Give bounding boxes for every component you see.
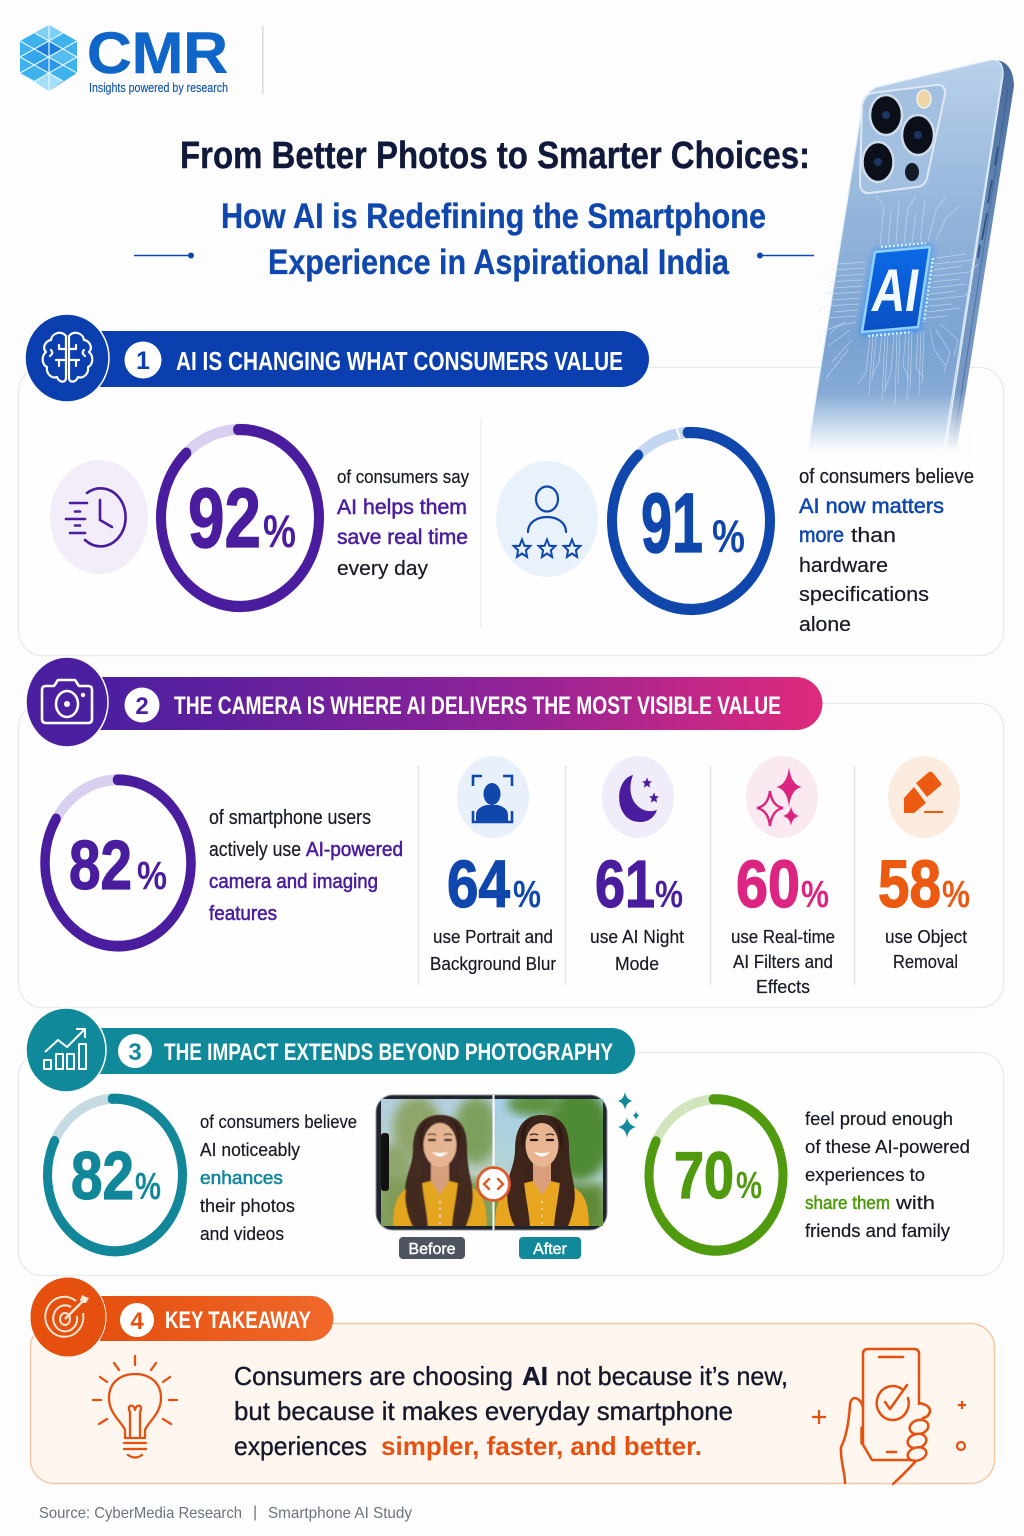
- stat: object removal: [878, 756, 970, 972]
- gauge: 70%: [647, 1097, 785, 1253]
- text: 92% description: AI helps them: [337, 496, 467, 519]
- takeaway text: AI: [522, 1361, 548, 1391]
- number badge: 1: [136, 347, 150, 375]
- text: 92% description: save real time: [337, 526, 468, 549]
- gauge: 82% camera: 82: [69, 826, 132, 904]
- takeaway text: Consumers are choosing: [234, 1361, 513, 1391]
- text: 82% enhancement description: AI noticeably: [200, 1139, 301, 1160]
- gauge: 82% enhancement: %: [135, 1166, 161, 1208]
- phone back: [806, 60, 1003, 460]
- camera bump: [860, 85, 945, 193]
- wordmark: CMR: [87, 21, 228, 86]
- stat: object removal: %: [942, 874, 970, 916]
- gauge: 82% enhancement: [45, 1096, 185, 1254]
- icon: hand holding phone: [841, 1349, 930, 1484]
- number badge: 2: [135, 693, 149, 720]
- bottom fade: [800, 392, 972, 462]
- icon: portrait: [457, 756, 529, 838]
- icon: sparkles: [746, 756, 818, 838]
- gauge: 82% enhancement: 82: [71, 1138, 134, 1214]
- gauge: 91%: %: [712, 510, 745, 562]
- header band: [100, 677, 822, 730]
- text: 82% camera description: AI-powered: [306, 839, 403, 861]
- stat: portrait blur: [430, 756, 556, 974]
- CMR logo: [20, 21, 228, 95]
- number badge: [124, 342, 162, 378]
- stat: object removal: use Object: [885, 926, 967, 947]
- title: From Better Photos to Smarter Choices:: [180, 135, 810, 177]
- section 2 header: [26, 657, 822, 747]
- number badge: 3: [128, 1039, 142, 1066]
- takeaway text: [234, 1361, 788, 1461]
- stat: portrait blur: 64: [447, 847, 510, 922]
- AI chip: [860, 243, 933, 336]
- takeaway text: but because it makes everyday smartphone: [234, 1396, 733, 1426]
- chip label: AI: [870, 257, 919, 324]
- gauge: 91%: [609, 427, 773, 613]
- icon: moon and stars: [602, 756, 674, 838]
- icon: person with three stars: [496, 461, 598, 577]
- text: 82% camera description: camera and imaging: [209, 871, 378, 893]
- text: 82% enhancement description: [200, 1111, 357, 1244]
- text: 91% description: alone: [799, 614, 851, 636]
- icon: target with arrow: [30, 1277, 106, 1357]
- source line: |: [253, 1504, 257, 1521]
- icon: brain: [25, 314, 109, 402]
- number badge: [124, 688, 160, 722]
- text: 92% description: of consumers say: [337, 466, 470, 487]
- stat: night mode: Mode: [615, 953, 659, 974]
- text: 70% description: friends and family: [805, 1220, 951, 1241]
- text: 82% enhancement description: enhances: [200, 1167, 283, 1188]
- stat: filters: AI Filters and: [733, 951, 833, 972]
- header band: [100, 1028, 635, 1074]
- text: 82% camera description: features: [209, 903, 277, 925]
- stat: filters: 60: [736, 847, 800, 922]
- icon: growth chart: [26, 1008, 106, 1092]
- label: before: Before: [408, 1241, 456, 1258]
- text: 92% description: every day: [337, 558, 428, 580]
- text: 91% description: than: [851, 525, 896, 547]
- stat: filters: %: [801, 874, 829, 916]
- text: 91% description: more: [799, 524, 844, 547]
- text: 70% description: experiences to: [805, 1164, 925, 1185]
- card 1 outline: [18, 368, 1004, 656]
- stat: filters: [731, 756, 835, 997]
- text: 92% description: [337, 466, 470, 580]
- source line: Source: CyberMedia Research: [39, 1505, 242, 1522]
- gauge: 91%: 91: [641, 476, 703, 570]
- label: after: After: [533, 1241, 568, 1258]
- phone illustration: [800, 60, 1014, 462]
- takeaway text: not because it’s new,: [556, 1361, 788, 1391]
- subtitle: Experience in Aspirational India: [268, 243, 729, 282]
- section 3 header: [26, 1008, 635, 1092]
- icon: eraser: [888, 756, 960, 838]
- takeaway text: experiences: [234, 1431, 367, 1461]
- text: 82% enhancement description: their photos: [200, 1195, 295, 1216]
- gauge: 92%: %: [263, 505, 296, 557]
- text: 70% description: feel proud enough: [805, 1108, 953, 1129]
- source line: Smartphone AI Study: [268, 1505, 412, 1522]
- text: 70% description: share them: [805, 1192, 890, 1213]
- text: 82% camera description: [209, 807, 403, 925]
- section 4 header: [30, 1277, 334, 1357]
- header band: [100, 1296, 334, 1341]
- text: 91% description: AI now matters: [799, 495, 944, 518]
- number badge: [118, 1034, 152, 1068]
- stat: portrait blur: Background Blur: [430, 953, 556, 974]
- text: 91% description: specifications: [799, 584, 929, 606]
- gauge: 82% camera: %: [137, 854, 167, 898]
- section 1 header: [25, 314, 649, 402]
- label: before: [399, 1237, 465, 1259]
- stat: filters: Effects: [756, 976, 810, 997]
- lenses: [862, 90, 934, 182]
- text: 82% camera description: actively use: [209, 839, 301, 861]
- number badge: 4: [130, 1308, 144, 1335]
- after image: [494, 1099, 603, 1226]
- before and after phone: [376, 1089, 612, 1230]
- stat: object removal: 58: [878, 847, 941, 922]
- number badge: [120, 1303, 154, 1337]
- card 3 outline: [18, 1052, 1004, 1276]
- icon: slider handle: [478, 1168, 510, 1200]
- label: after: [519, 1237, 581, 1259]
- gauge: 70%: %: [736, 1165, 762, 1207]
- header label: THE CAMERA IS WHERE AI DELIVERS THE MOST VISIBLE VALUE: [174, 692, 781, 720]
- source line: [39, 1504, 412, 1522]
- text: 91% description: hardware: [799, 555, 888, 577]
- gauge: 70%: 70: [674, 1138, 734, 1212]
- phone side band: [930, 60, 1014, 460]
- stat: portrait blur: use Portrait and: [433, 926, 553, 947]
- circuit traces: [818, 196, 978, 405]
- takeaway text: simpler, faster, and better.: [381, 1431, 702, 1461]
- text: 82% camera description: of smartphone users: [209, 807, 371, 829]
- stat: filters: use Real-time: [731, 926, 835, 947]
- text: 82% enhancement description: and videos: [200, 1223, 284, 1244]
- icon: hexagon cube mark: [20, 25, 77, 91]
- icon: teal sparkles: [618, 1092, 639, 1138]
- icon: light bulb: [93, 1356, 177, 1458]
- text: 82% enhancement description: of consumers believe: [200, 1111, 357, 1132]
- icon: clock with speed lines: [50, 460, 148, 574]
- stat: night mode: 61: [595, 847, 655, 922]
- header label: THE IMPACT EXTENDS BEYOND PHOTOGRAPHY: [164, 1039, 613, 1066]
- text: 91% description: [799, 466, 974, 636]
- stat: object removal: Removal: [893, 951, 958, 972]
- subtitle: [221, 197, 766, 282]
- header band: [100, 331, 649, 387]
- text: 91% description: of consumers believe: [799, 466, 974, 488]
- stat: night mode: [590, 756, 684, 974]
- header label: AI IS CHANGING WHAT CONSUMERS VALUE: [176, 346, 623, 376]
- subtitle: How AI is Redefining the Smartphone: [221, 197, 766, 236]
- text: 70% description: [805, 1108, 970, 1241]
- stat: portrait blur: %: [513, 874, 541, 916]
- tagline: Insights powered by research: [89, 81, 228, 95]
- card 2 outline: [18, 704, 1004, 1008]
- panel: key takeaway: [30, 1324, 994, 1484]
- gauge: 92%: 92: [188, 471, 261, 565]
- stat: night mode: %: [655, 874, 683, 916]
- text: 70% description: with: [895, 1192, 935, 1213]
- stat: night mode: use AI Night: [590, 926, 684, 947]
- gauge: 82% camera: [45, 780, 191, 946]
- text: 70% description: of these AI-powered: [805, 1136, 970, 1157]
- before image: [381, 1099, 492, 1226]
- icon: camera: [26, 657, 108, 747]
- gauge: 92%: [160, 428, 320, 608]
- header label: KEY TAKEAWAY: [165, 1307, 311, 1334]
- decorative plus and ring: [812, 1401, 966, 1450]
